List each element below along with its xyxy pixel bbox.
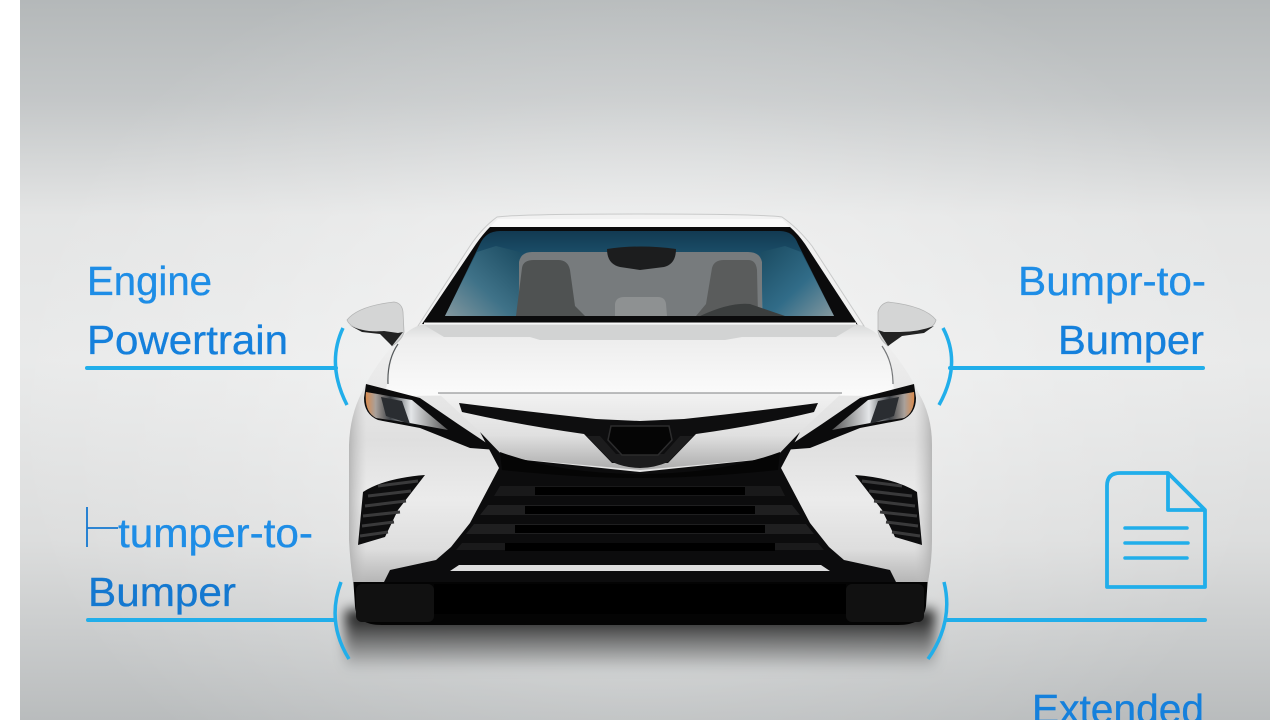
bumper chrome strip <box>450 565 830 571</box>
headlight right <box>783 384 916 450</box>
right air intake <box>855 475 922 545</box>
nose panel <box>438 393 842 470</box>
left air intake <box>358 475 425 545</box>
icon: document <box>1107 473 1205 587</box>
lower bumper and tyres <box>353 576 928 625</box>
rearview mirror <box>607 246 676 270</box>
callout: bumper-to-bumper bottom left: tumper-to- <box>118 510 313 556</box>
callout: bumper-to-bumper top right: Bumpr-to- <box>1018 258 1206 304</box>
hood <box>386 324 894 396</box>
mirror right <box>878 302 936 346</box>
mirror left <box>347 302 404 346</box>
car front view <box>345 214 936 670</box>
ground shadow <box>345 610 935 670</box>
callout: extended warranty <box>928 582 1205 720</box>
callout: bumper-to-bumper bottom left <box>87 507 349 659</box>
rear seat centre <box>615 297 667 316</box>
callout: engine powertrain: Engine <box>87 258 212 304</box>
roof and windshield frame <box>418 214 864 326</box>
seats <box>516 260 785 316</box>
headlight left <box>364 384 497 450</box>
upper grille <box>459 403 818 468</box>
body edge shading <box>349 346 932 582</box>
windshield glass <box>445 231 834 316</box>
callout: bumper-to-bumper bottom left: Bumper <box>88 569 236 615</box>
callout: engine powertrain <box>87 258 347 405</box>
lower grille <box>384 432 896 582</box>
callout: bumper-to-bumper top right <box>939 258 1206 405</box>
callout: bumper-to-bumper top right: Bumper <box>1058 317 1204 363</box>
callout: engine powertrain: Powertrain <box>87 317 288 363</box>
body panel <box>349 346 932 582</box>
